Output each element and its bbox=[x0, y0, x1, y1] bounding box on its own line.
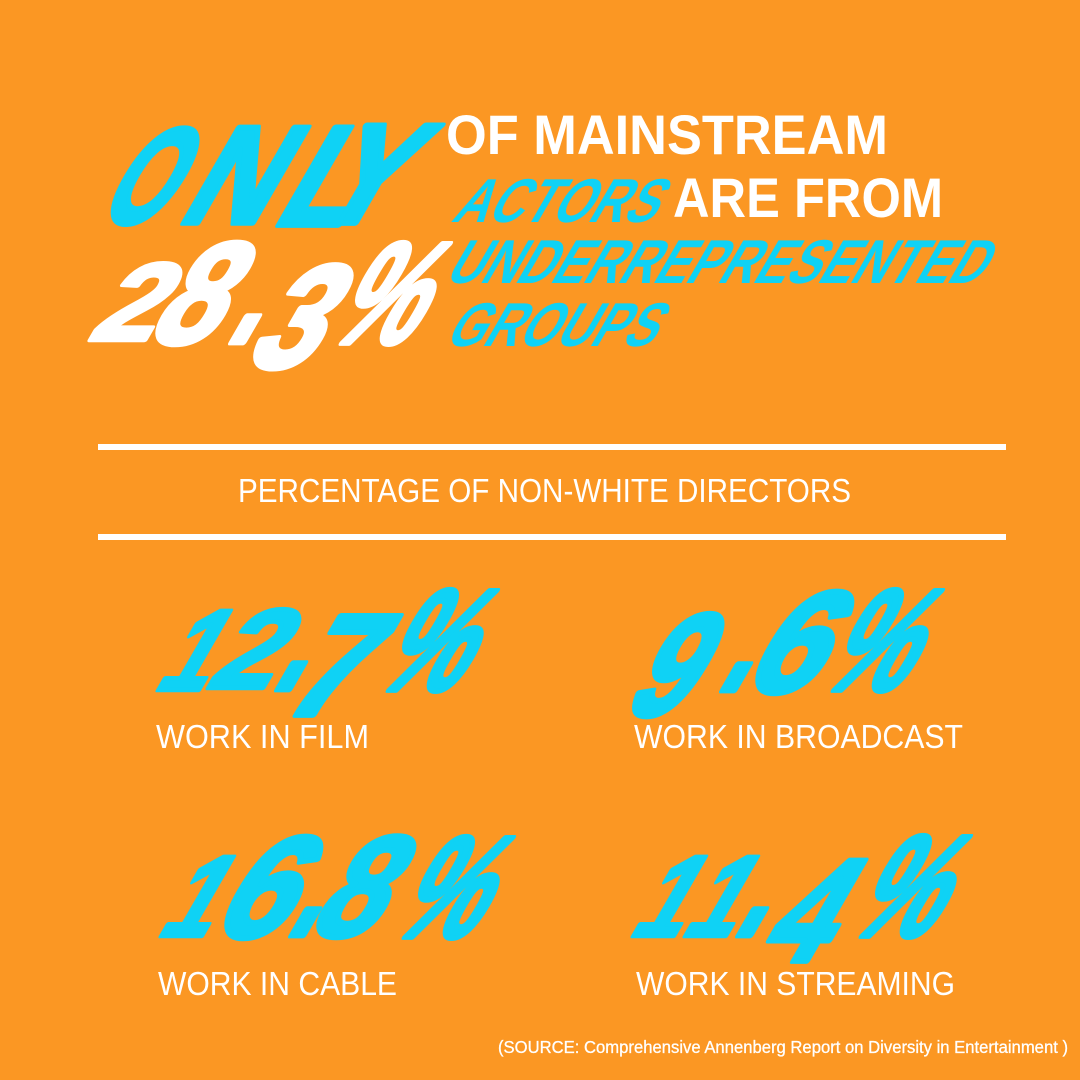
label: work in streaming: WORK IN STREAMING bbox=[636, 965, 955, 1002]
heading: of mainstream actors are from underrepresented groups: ACTORS bbox=[442, 166, 685, 236]
heading: 28.3%: 8 bbox=[126, 213, 286, 374]
section heading: PERCENTAGE OF NON-WHITE DIRECTORS bbox=[238, 473, 851, 510]
value: 16.8%: 6 bbox=[190, 807, 356, 968]
source: (SOURCE: Comprehensive Annenberg Report on Diversity in Entertainment ) bbox=[498, 1037, 1068, 1057]
value: 11.4%: % bbox=[827, 805, 1005, 967]
heading: only bbox=[78, 94, 463, 256]
stat: broadcast bbox=[602, 537, 977, 755]
label: work in broadcast: WORK IN BROADCAST bbox=[634, 718, 963, 755]
value: 11.4%: . bbox=[710, 782, 847, 972]
value: 12.7%: % bbox=[354, 559, 532, 721]
stat: streaming bbox=[612, 782, 1005, 1002]
label: work in film: WORK IN FILM bbox=[156, 718, 369, 755]
value: 12.7%: . bbox=[249, 536, 386, 726]
stat: film bbox=[137, 536, 532, 755]
heading: 28.3%: 3 bbox=[224, 236, 384, 399]
label: work in cable: WORK IN CABLE bbox=[158, 965, 397, 1002]
heading: of mainstream actors are from underrepresented groups: ARE FROM bbox=[673, 166, 943, 229]
heading: only: O bbox=[78, 100, 232, 252]
value: 16.8%: 8 bbox=[287, 806, 447, 967]
value: 12.7%: 7 bbox=[259, 585, 425, 746]
value: 11.4%: 4 bbox=[737, 828, 895, 992]
heading: 28.3%: % bbox=[307, 212, 485, 374]
value: 12.7%: 1 bbox=[137, 587, 262, 715]
value: 16.8% bbox=[140, 782, 548, 972]
value: 11.4%: 1 bbox=[664, 833, 789, 961]
heading: only: N bbox=[157, 98, 334, 253]
heading: of mainstream actors are from underrepresented groups: OF MAINSTREAM bbox=[446, 103, 888, 166]
stat: cable bbox=[140, 782, 548, 1002]
value: 9.6% bbox=[602, 537, 977, 747]
value: 9.6%: 6 bbox=[721, 562, 887, 723]
divider top bbox=[98, 444, 1006, 450]
heading: only: L bbox=[252, 98, 417, 256]
value: 16.8%: 1 bbox=[140, 833, 265, 961]
divider bottom bbox=[98, 534, 1006, 540]
heading: of mainstream actors are from underrepresented groups bbox=[435, 103, 1012, 360]
value: 9.6%: % bbox=[799, 559, 977, 721]
value: 12.7% bbox=[137, 536, 532, 746]
heading: 28.3% bbox=[72, 189, 485, 399]
value: 12.7%: 2 bbox=[190, 587, 326, 713]
heading: 28.3%: . bbox=[203, 189, 340, 379]
value: 9.6%: . bbox=[694, 537, 831, 727]
value: 11.4% bbox=[612, 782, 1005, 992]
heading: of mainstream actors are from underrepresented groups: GROUPS bbox=[435, 290, 684, 360]
value: 16.8%: % bbox=[370, 806, 548, 968]
value: 9.6%: 9 bbox=[602, 585, 756, 747]
value: 11.4%: 1 bbox=[612, 833, 737, 961]
heading: 28.3%: 2 bbox=[72, 240, 208, 364]
value: 16.8%: . bbox=[263, 782, 400, 972]
heading: only: Y bbox=[289, 94, 463, 253]
